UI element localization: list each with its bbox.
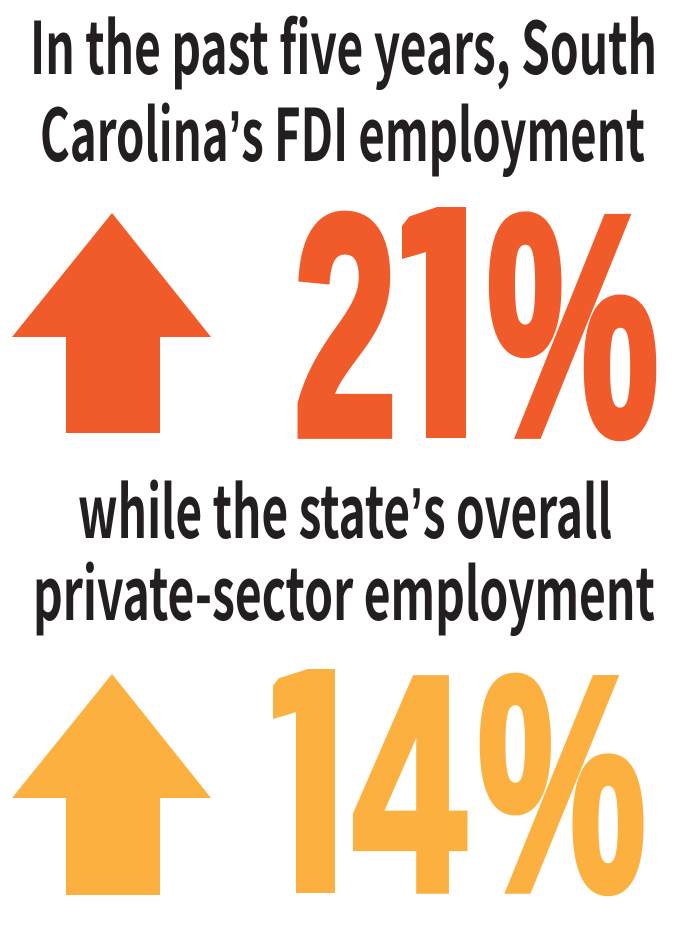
stat: 21 percent: 1 [399, 152, 486, 501]
icon: yellow up arrow [12, 674, 211, 895]
stat: 21 percent: 2 [294, 151, 397, 501]
stat: 21 percent: % [487, 152, 658, 501]
icon: orange up arrow [12, 213, 211, 433]
stat: 21 percent [298, 207, 656, 442]
stat: 14 percent [273, 669, 644, 896]
